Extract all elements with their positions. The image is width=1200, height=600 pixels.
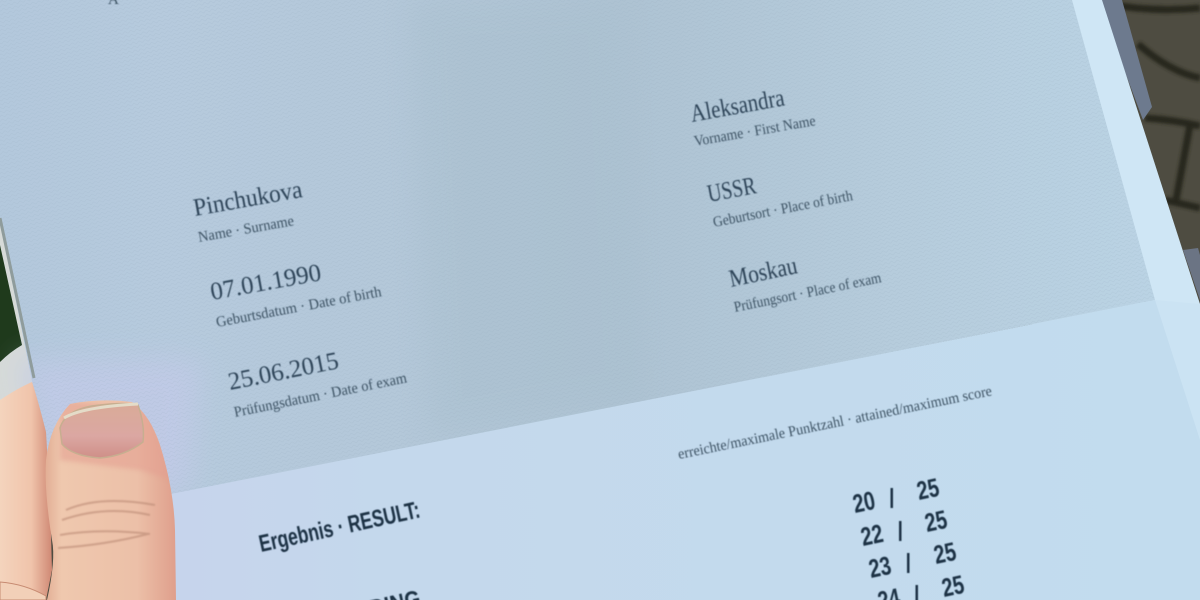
field: surname: Name · Surname [197,213,296,246]
nail tip [64,404,138,418]
score column caption: erreichte/maximale Punktzahl · attained/maximum score [677,383,994,463]
score row 2: 22 [858,518,886,552]
grey folder edge lower [1183,248,1200,300]
field: place of exam [727,252,883,316]
score row 2 [858,504,950,552]
panel: plain lower area of the certificate [120,300,1200,600]
score row 3: 23 [866,550,894,584]
field: place of exam: Prüfungsort · Place of exam [733,270,883,316]
field: first name: Vorname · First Name [693,113,817,150]
thumbnail [60,404,143,458]
score row 1 [850,472,942,519]
scores table [850,472,967,600]
field: date of exam: Prüfungsdatum · Date of exam [233,370,409,421]
field: place of birth: Geburtsort · Place of birth [712,188,855,231]
score row 3: 25 [931,536,959,570]
hand holding the paper [0,382,176,600]
field: date of exam: 25.06.2015 [226,347,341,396]
score row 1: 20 [850,485,878,519]
field: date of birth: 07.01.1990 [208,259,323,306]
foliage dark green [0,245,22,362]
background: foliage behind paper [0,210,50,430]
paper margin continuation [1155,300,1200,440]
field: date of birth [208,259,383,331]
score row 2: 25 [922,504,950,538]
field: first name: Aleksandra [688,85,787,128]
field: place of birth [705,172,855,231]
field: first name [688,85,817,150]
field: surname [191,176,304,246]
grey folder edge top [1098,0,1152,120]
lower finger crease [0,582,46,600]
thumb [46,400,176,600]
score row 3 [866,536,959,584]
field: place of exam: Moskau [727,252,800,293]
field: date of birth: Geburtsdatum · Date of birth [215,284,383,331]
knuckle creases [58,501,155,548]
field: place of birth: USSR [705,172,759,208]
field: surname: Pinchukova [191,176,304,222]
field: date of exam [226,347,409,421]
paper white margin [1000,0,1200,600]
score row 1: 25 [914,472,942,506]
score row 4 [875,569,967,600]
finger behind [0,382,52,600]
thumb tip redness [60,400,172,480]
heading: result: Ergebnis · RESULT: [257,497,423,558]
certificate text [108,0,994,600]
